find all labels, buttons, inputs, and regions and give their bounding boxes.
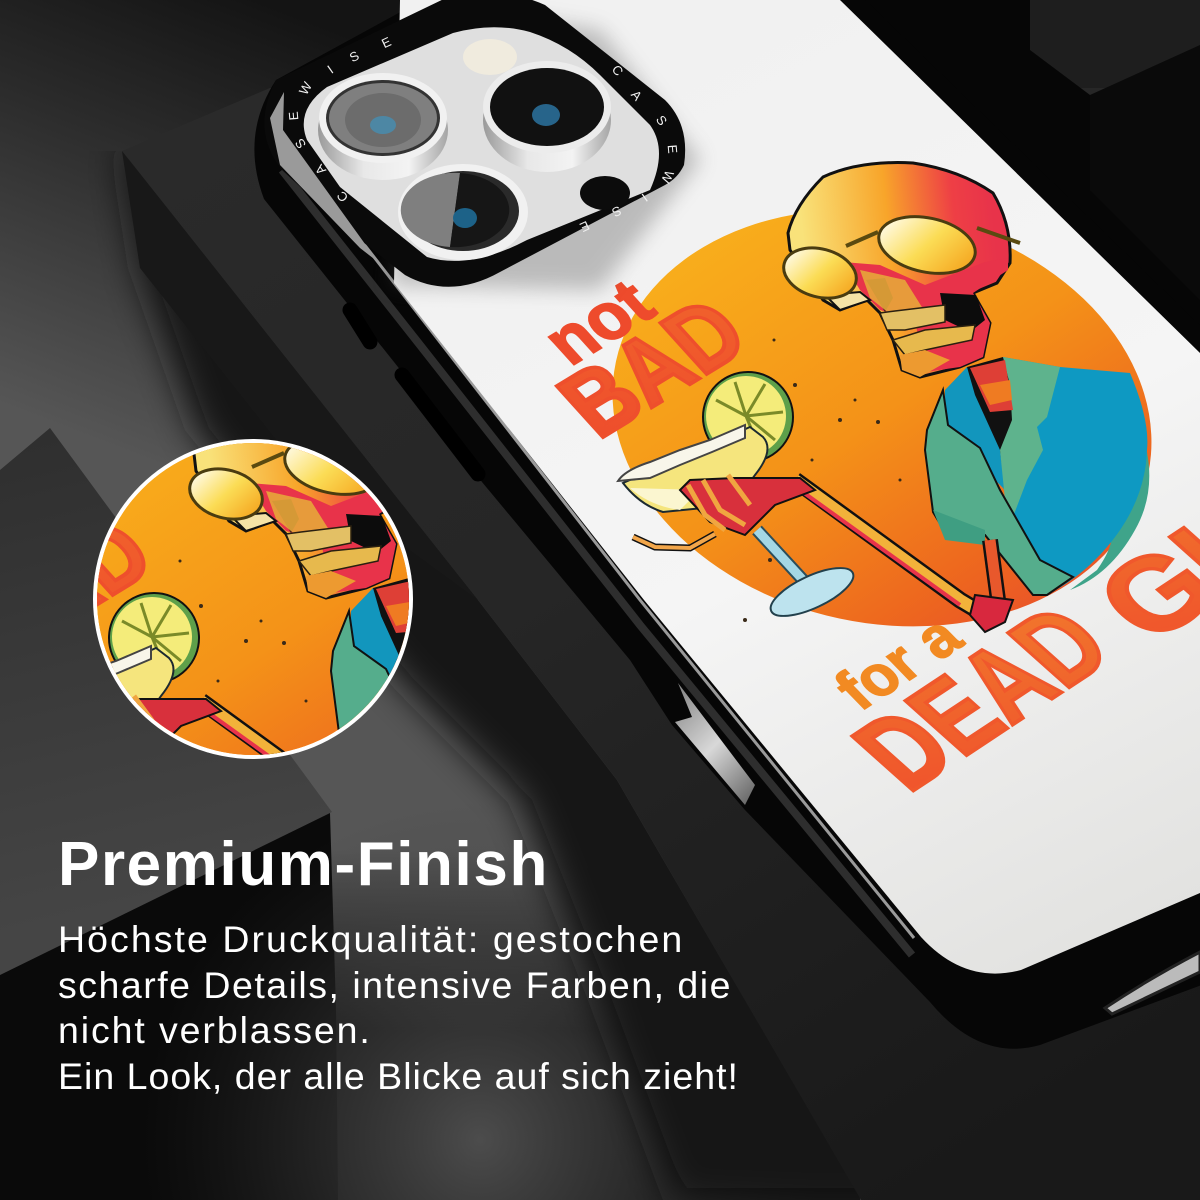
CASEWISE engraved: A bbox=[628, 87, 645, 104]
body text: Ein Look, der alle Blicke auf sich zieht! bbox=[58, 1054, 739, 1096]
CASEWISE engraved: I bbox=[325, 62, 336, 77]
artwork on phone bbox=[527, 161, 1200, 811]
sensor bbox=[580, 176, 630, 210]
CASEWISE engraved: S bbox=[653, 112, 670, 128]
side switch bbox=[350, 310, 370, 342]
zoom circle detail bbox=[93, 439, 413, 759]
power button bbox=[675, 683, 755, 805]
body text: scharfe Details, intensive Farben, die bbox=[58, 964, 732, 1006]
phone face bbox=[394, 0, 1200, 974]
CASEWISE engraved: E bbox=[286, 111, 301, 121]
camera island bbox=[264, 0, 700, 290]
CASEWISE engraved: I bbox=[639, 190, 650, 205]
camera lens top right bbox=[483, 61, 611, 172]
CASEWISE engraved: E bbox=[379, 34, 394, 51]
CASEWISE engraved: E bbox=[665, 144, 680, 154]
CASEWISE engraved: S bbox=[292, 136, 309, 152]
CASEWISE engraved: E bbox=[577, 218, 592, 235]
CASEWISE engraved: S bbox=[609, 203, 624, 220]
charging port bbox=[1105, 952, 1200, 1014]
CASEWISE engraved: W bbox=[296, 79, 315, 97]
flash bbox=[463, 39, 517, 75]
CASEWISE engraved: W bbox=[658, 168, 677, 186]
CASEWISE engraved: A bbox=[312, 161, 329, 178]
body text: Höchste Druckqualität: gestochen bbox=[58, 918, 684, 960]
CASEWISE engraved bbox=[286, 34, 680, 235]
CASEWISE engraved: C bbox=[609, 62, 626, 79]
CASEWISE engraved: S bbox=[347, 48, 362, 65]
volume buttons bbox=[402, 375, 478, 474]
heading: Premium-Finish bbox=[58, 830, 549, 899]
phone body bbox=[254, 0, 1200, 1049]
lower left block bbox=[0, 428, 338, 1200]
CASEWISE engraved: C bbox=[334, 188, 351, 205]
camera lens bottom bbox=[398, 164, 528, 260]
body text bbox=[58, 918, 739, 1096]
body text: nicht verblassen. bbox=[58, 1009, 372, 1051]
floor glow bbox=[0, 800, 900, 1200]
camera lens top left bbox=[318, 73, 448, 180]
